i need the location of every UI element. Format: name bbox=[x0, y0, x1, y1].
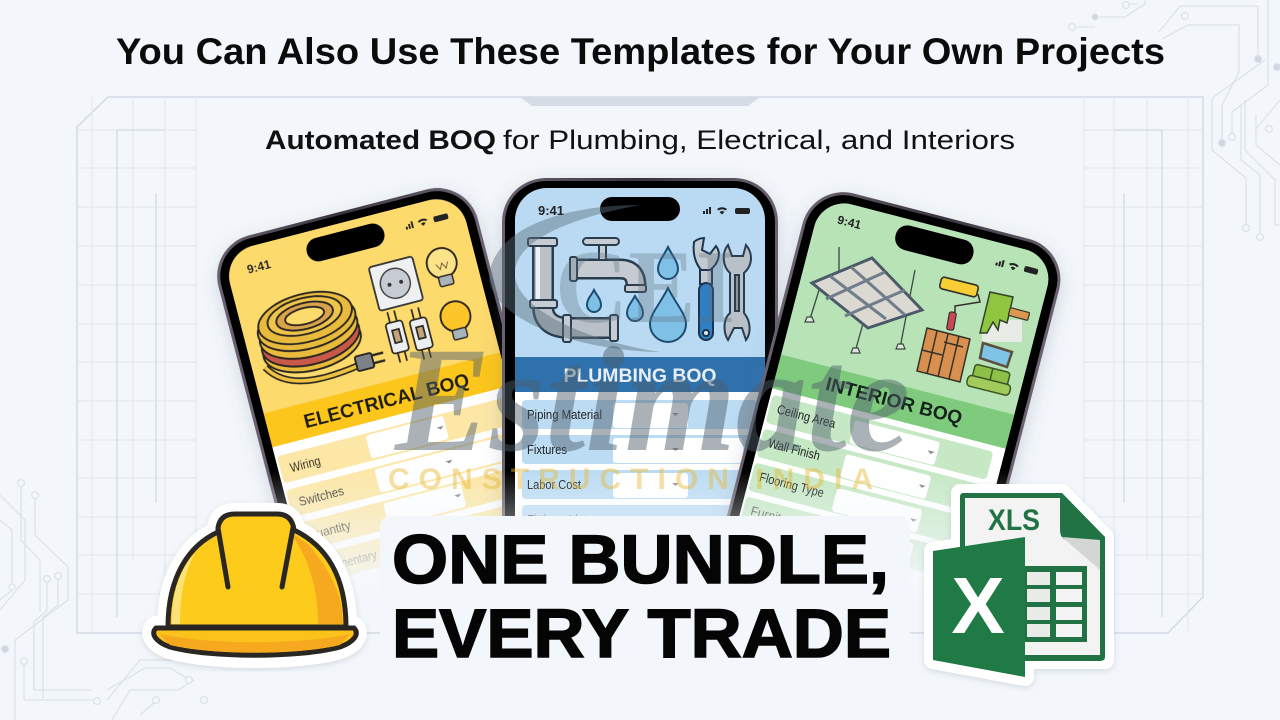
form rows: plumbing: Fixtures bbox=[527, 442, 567, 457]
icon: adjustable wrench bbox=[694, 238, 719, 340]
form rows: plumbing bbox=[522, 400, 756, 516]
form rows: electrical: Wiring bbox=[288, 453, 322, 475]
watermark initials: CEI bbox=[555, 228, 735, 345]
form rows: electrical: Switches bbox=[297, 483, 346, 509]
icon: pipe bbox=[528, 238, 618, 342]
form rows: interior: Ceiling Area bbox=[775, 402, 838, 431]
form rows: electrical: Commentary bbox=[315, 547, 379, 577]
form rows: interior: Wall Finish bbox=[767, 435, 822, 463]
label: interior BOQ: INTERIOR BOQ bbox=[823, 374, 964, 429]
label: plumbing BOQ: PLUMBING BOQ bbox=[564, 366, 716, 387]
headline bbox=[392, 521, 891, 672]
icon: wood flooring bbox=[917, 328, 970, 382]
notch bbox=[306, 223, 385, 262]
phone: plumbing BOQ bbox=[494, 177, 785, 516]
phone: interior BOQ bbox=[726, 192, 1067, 572]
headline: EVERY TRADE bbox=[392, 595, 891, 672]
header band: plumbing bbox=[515, 357, 765, 392]
watermark word: Estimate bbox=[393, 317, 910, 483]
phones group bbox=[212, 177, 1067, 575]
X mark: X bbox=[951, 561, 1005, 650]
icon: paint roller bbox=[939, 277, 980, 331]
icon: cable coil bbox=[256, 290, 362, 385]
header band: electrical bbox=[264, 352, 509, 447]
subtitle bbox=[265, 125, 1015, 155]
status icons bbox=[995, 260, 1038, 275]
phone bottom fade bbox=[270, 470, 1030, 600]
circuit traces: bottom left bbox=[0, 480, 207, 720]
icon: wall socket bbox=[368, 256, 423, 311]
icon: spanner bbox=[724, 245, 751, 340]
subtitle: for Plumbing, Electrical, and Interiors bbox=[503, 125, 1015, 155]
icon: plug bbox=[354, 350, 386, 371]
icon: picture frame bbox=[980, 343, 1012, 367]
icon: ceiling grid bbox=[805, 247, 922, 353]
status icons bbox=[703, 207, 750, 214]
form rows: plumbing: Fittings List bbox=[527, 512, 587, 527]
form rows: interior bbox=[739, 395, 993, 581]
bottom headline panel bbox=[380, 516, 910, 686]
icon: water drops bbox=[587, 247, 686, 342]
notch bbox=[895, 225, 974, 264]
subtitle: Automated BOQ bbox=[265, 125, 496, 155]
icon: faucet bbox=[570, 238, 646, 292]
form rows: plumbing: Labor Cost bbox=[527, 477, 581, 492]
blueprint frame and grid bbox=[77, 97, 1203, 633]
icon: sofa bbox=[966, 363, 1014, 396]
icon: wall finish bbox=[980, 292, 1030, 342]
title: You Can Also Use These Templates for Your Own Projects bbox=[116, 31, 1165, 72]
header band: interior bbox=[772, 354, 1014, 449]
icon: Excel XLS file bbox=[933, 493, 1105, 677]
form rows: plumbing: Piping Material bbox=[527, 407, 602, 422]
watermark tagline: CONSTRUCTION INDIA bbox=[388, 463, 873, 496]
icon: light bulb outline bbox=[425, 246, 458, 288]
notch bbox=[600, 197, 680, 221]
form rows: electrical bbox=[278, 398, 502, 575]
headline: ONE BUNDLE, bbox=[392, 521, 889, 598]
document bbox=[960, 493, 1105, 661]
front cover bbox=[933, 537, 1025, 677]
icon: hard hat bbox=[153, 514, 356, 657]
time: 9:41 bbox=[538, 203, 564, 218]
form rows: interior: Flooring Type bbox=[758, 469, 826, 500]
icon: switches bbox=[384, 307, 434, 363]
time: 9:41 bbox=[245, 257, 273, 277]
form rows: electrical: Quantity bbox=[306, 517, 353, 543]
file type label: XLS bbox=[988, 504, 1040, 537]
sticker outline bbox=[933, 493, 1105, 677]
circuit traces: top right bbox=[1069, 0, 1280, 240]
form rows: interior: Furniture bbox=[749, 503, 799, 530]
frame notch bbox=[520, 97, 760, 106]
icon: light bulb lit bbox=[439, 300, 472, 341]
label: electrical BOQ: ELECTRICAL BOQ bbox=[302, 370, 472, 433]
phone: electrical BOQ bbox=[212, 187, 502, 575]
time: 9:41 bbox=[836, 213, 863, 232]
status icons bbox=[405, 212, 449, 230]
spreadsheet grid bbox=[1020, 566, 1087, 642]
watermark: logo bbox=[388, 205, 910, 496]
watermark swoosh bbox=[489, 205, 660, 352]
